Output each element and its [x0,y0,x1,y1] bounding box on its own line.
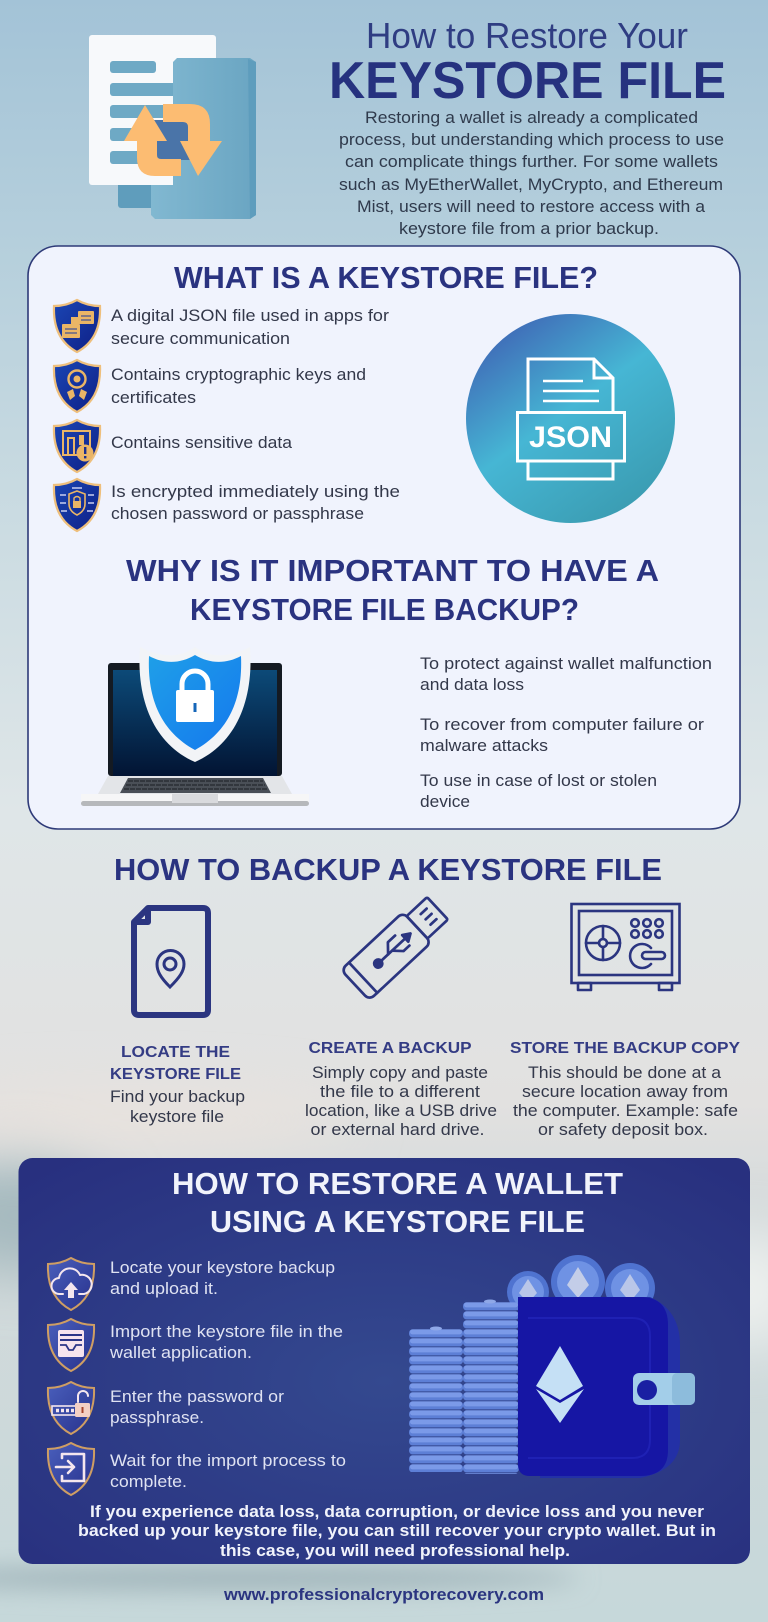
intro text: can complicate things further. For some wallets [345,152,718,171]
column: create a backup: CREATE A BACKUP [308,1040,472,1057]
recycle centre [150,120,190,160]
sheet lines [110,61,176,164]
intro text: Mist, users will need to restore access with a [357,197,706,216]
laptop base [81,794,309,802]
column: locate the keystore file: keystore file [130,1108,224,1126]
laptop screen [108,663,282,776]
text: reasons for backup: To use in case of lost or stolen [420,772,657,790]
text: reasons for backup [420,655,712,811]
heading: why backup [126,553,659,627]
title line: how to restore: How to Restore Your [366,15,688,56]
text: locate backup: and upload it. [110,1280,218,1298]
heading: what is a keystore file: WHAT IS A KEYSTORE FILE? [174,260,598,295]
text: reasons for backup: To recover from computer failure or [420,716,705,734]
column: locate the keystore file [110,1044,245,1126]
column: store the backup copy: This should be done at a [528,1064,722,1082]
heading: restore: USING A KEYSTORE FILE [210,1204,585,1239]
icon: safe [572,904,680,990]
icon: file with location pin [134,908,208,1015]
text: reasons for backup: and data loss [420,676,524,694]
column: create a backup: location, like a USB drive [305,1102,497,1120]
column: create a backup: or external hard drive. [310,1121,484,1139]
panel: what is a keystore file and why back up [28,246,740,829]
text: json file: A digital JSON file used in apps for [111,307,390,325]
text: cryptographic keys [111,366,366,407]
column: locate the keystore file: Find your backup [110,1088,245,1106]
icon: shield encrypted [54,479,100,531]
text: locate backup [110,1259,335,1298]
text: reasons for backup: malware attacks [420,737,548,755]
column: create a backup [305,1040,497,1139]
icon: json file circle: JSON [529,421,612,454]
wallet back [540,1297,680,1478]
icon: shield certificate [54,360,100,412]
title line: keystore file: KEYSTORE FILE [329,52,726,110]
blue folder [151,58,256,219]
icon: shield import tray [48,1319,94,1371]
column: create a backup: Simply copy and paste [312,1064,488,1082]
intro text: Restoring a wallet is already a complicated [365,108,698,127]
white sheet [89,35,216,185]
text: cryptographic keys: certificates [111,389,196,407]
text: encrypted: Is encrypted immediately using the [111,483,400,501]
intro text: process, but understanding which process to use [339,130,724,149]
title [329,15,726,110]
icon: shield sensitive data [54,420,100,472]
panel card [28,246,740,829]
icon: shield sign in [48,1443,94,1495]
column: store the backup copy: secure location away from [522,1083,728,1101]
text: wait [110,1452,346,1491]
text: cryptographic keys: Contains cryptographic keys and [111,366,366,384]
column: locate the keystore file: KEYSTORE FILE [110,1066,241,1083]
arrows [124,104,222,176]
website url: www.professionalcryptorecovery.com [223,1585,544,1604]
text: wait: Wait for the import process to [110,1452,346,1470]
icon: shield password lock [48,1382,94,1434]
lock [182,671,208,690]
text: import [109,1323,343,1362]
top coins [507,1255,655,1313]
intro text [339,108,724,238]
text: password [110,1388,285,1427]
column: store the backup copy: or safety deposit box. [538,1121,708,1139]
intro text: keystore file from a prior backup. [399,219,659,238]
text: json file: secure communication [111,330,290,348]
text: sensitive data: Contains sensitive data [111,434,293,452]
heading: why backup: KEYSTORE FILE BACKUP? [190,592,579,627]
text: import: wallet application. [109,1344,252,1362]
shield [139,647,251,762]
wallet front [518,1297,668,1476]
text: password: Enter the password or [110,1388,285,1406]
coin stack short [409,1326,463,1472]
text: reasons for backup: To protect against wallet malfunction [420,655,712,673]
laptop deck [98,776,292,794]
column: store the backup copy: STORE THE BACKUP COPY [510,1040,740,1057]
heading: restore [172,1166,623,1239]
text: wait: complete. [110,1473,187,1491]
text: locate backup: Locate your keystore backup [110,1259,335,1277]
text: encrypted [111,483,400,523]
keyboard keys [124,781,267,789]
callout: professional help: backed up your keystore file, you can still recover your crypto wallet. But in [78,1521,716,1540]
wallet clasp [633,1373,695,1405]
back folder tab [118,180,168,208]
icon: usb drive [341,893,452,1000]
coin stack tall [463,1300,519,1474]
text: import: Import the keystore file in the [110,1323,343,1341]
icon: shield messages [54,300,100,352]
icon: shield cloud upload [48,1258,94,1310]
text: encrypted: chosen password or passphrase [111,505,364,523]
icon: json file circle [466,314,675,523]
dark card [18,1158,750,1564]
column: create a backup: the file to a different [320,1083,480,1101]
heading: why backup: WHY IS IT IMPORTANT TO HAVE A [126,553,659,588]
intro text: such as MyEtherWallet, MyCrypto, and Ethereum [339,175,723,194]
column: locate the keystore file: LOCATE THE [121,1044,230,1061]
column: store the backup copy [510,1040,740,1139]
callout: professional help: If you experience data loss, data corruption, or device loss and you never [90,1502,704,1521]
heading: how to backup: HOW TO BACKUP A KEYSTORE FILE [114,852,662,887]
ethereum symbol [536,1346,584,1423]
text: reasons for backup: device [420,793,470,811]
icon: file with refresh arrows [89,35,256,219]
callout: professional help: this case, you will need professional help. [220,1541,570,1560]
callout: professional help [78,1502,716,1560]
column: store the backup copy: the computer. Example: safe [513,1102,738,1120]
text: password: passphrase. [110,1409,204,1427]
text: json file [111,307,390,348]
icon: laptop with shield [81,647,309,806]
illustration: wallet with coins [409,1255,695,1478]
panel: how to restore a wallet [18,1158,750,1564]
heading: restore: HOW TO RESTORE A WALLET [172,1166,623,1201]
